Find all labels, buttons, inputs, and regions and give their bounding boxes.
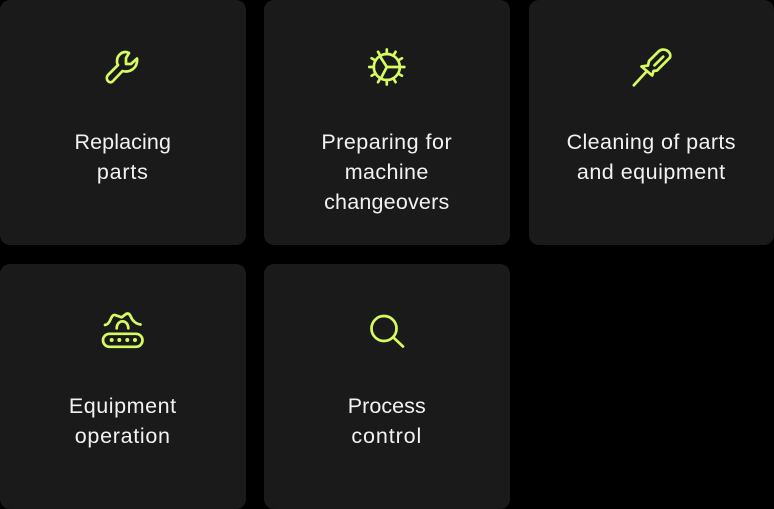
icon: wrench <box>105 50 138 84</box>
label: equipment operation <box>69 394 177 448</box>
label: preparing for machine changeovers <box>321 130 452 214</box>
label: preparing for machine changeovers: changeovers <box>324 190 449 214</box>
label: process control: control <box>351 424 422 448</box>
label: equipment operation: Equipment <box>69 394 177 418</box>
panel: equipment operation <box>0 264 246 509</box>
icon: conveyor with dough <box>102 312 144 348</box>
label: cleaning of parts and equipment: Cleaning of parts <box>567 130 736 154</box>
label: cleaning of parts and equipment <box>567 130 736 184</box>
label: replacing parts: Replacing <box>74 130 171 154</box>
label: preparing for machine changeovers: Preparing for <box>321 130 452 154</box>
panel: process control <box>264 264 510 509</box>
label: replacing parts <box>74 130 171 184</box>
label: process control: Process <box>348 394 426 418</box>
panel: replacing parts <box>0 0 246 245</box>
label: cleaning of parts and equipment: and equipment <box>577 160 726 184</box>
panel: preparing for machine changeovers <box>264 0 510 245</box>
icon: screwdriver <box>632 48 672 87</box>
panel: cleaning of parts and equipment <box>528 0 774 245</box>
label: replacing parts: parts <box>97 160 149 184</box>
label: process control <box>348 394 426 448</box>
icon: gear <box>368 48 406 86</box>
label: equipment operation: operation <box>75 424 171 448</box>
icon: magnifying glass <box>370 314 404 348</box>
label: preparing for machine changeovers: machine <box>345 160 429 184</box>
